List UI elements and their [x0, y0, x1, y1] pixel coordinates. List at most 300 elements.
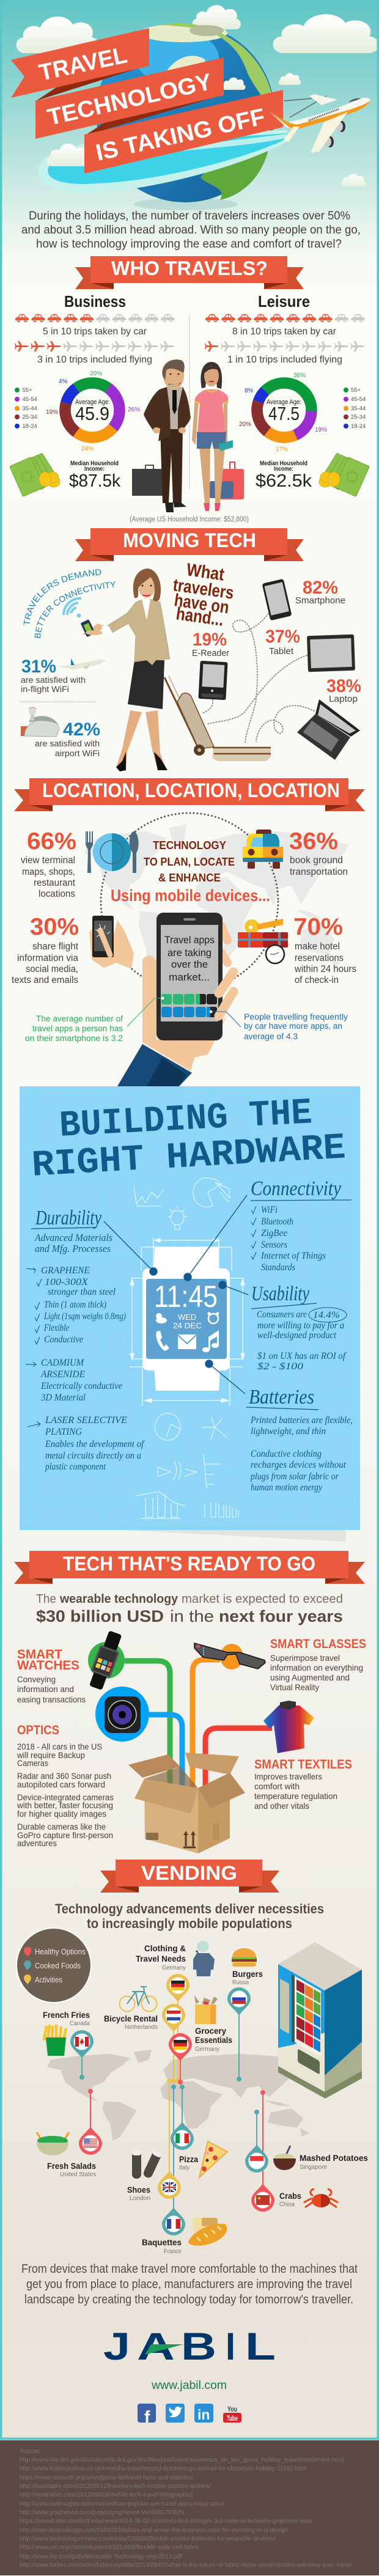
dotted connectors from devices to suitcase [202, 611, 314, 743]
location: burgers, Russia [227, 1948, 263, 2015]
location: pizza, Italy: Italy [179, 2164, 190, 2171]
text: smart textiles: and other vitals [254, 1801, 309, 1811]
legend: leisure age groups: 35-44 [351, 405, 366, 412]
income: business [69, 460, 120, 491]
wearable market headline: next four years [219, 1607, 343, 1625]
callout: 4.3 apps for car travellers: People travelling frequently [244, 1012, 348, 1021]
stat: 70% [293, 914, 356, 985]
text: smart glasses: Virtual Reality [270, 1682, 319, 1692]
stat: airport wifi 42% [21, 707, 100, 758]
text: smart textiles: comfort with [254, 1781, 300, 1791]
stat: 30%: social media, [26, 964, 78, 974]
note: average income: (Average US Household Income: $52,800) [130, 516, 249, 523]
section: connectivity: Sensors [261, 1240, 287, 1250]
laser selective plating: PLATING [45, 1427, 82, 1437]
sleeve [117, 1044, 192, 1086]
section: connectivity: Internet of Things [260, 1251, 326, 1261]
income: leisure: $62.5k [256, 471, 312, 491]
doodle: vertical arrow [204, 1454, 221, 1489]
doodle: small bars [205, 1503, 238, 1517]
location: french fries, Canada: French Fries [43, 2010, 90, 2020]
heading: RIGHT HARDWARE [31, 1127, 347, 1187]
location: burgers, Russia: Burgers [232, 1969, 263, 1979]
legend: leisure age groups: 45-54 [351, 396, 366, 403]
panel: sources: http://www.technologyreview.com/news/528996/flexible-printed-batteries-for-wearable-devices/ [20, 2535, 276, 2542]
stat: 70%: make hotel [295, 941, 340, 952]
wearable market headline: wearable technology [59, 1592, 178, 1606]
banner: Moving Tech [75, 528, 304, 561]
dotted ring [101, 813, 278, 990]
heading: technology to plan, locate and enhance [111, 839, 270, 905]
stat: e-reader 19% [192, 630, 229, 700]
stat: in-flight wifi 31%: 31% [21, 657, 56, 677]
text: optics [17, 1723, 114, 1848]
text: smart glasses: Superimpose travel [270, 1653, 340, 1663]
graphene list: 100-300X [45, 1277, 89, 1287]
illustration: businessman [144, 359, 191, 512]
stat: 30% [12, 914, 79, 985]
icon: airport terminal [21, 707, 59, 737]
text: smart watches: easing transactions [17, 1695, 86, 1704]
icon: alarm clock [208, 1312, 219, 1323]
location: grocery essentials, Germany: Essentials [195, 2035, 232, 2045]
icon: facebook [138, 2404, 156, 2426]
closing text [21, 2262, 358, 2306]
header illustration: globe, clouds, plane and title [11, 5, 379, 210]
location: clothing, Germany: Clothing & [144, 1943, 186, 1953]
wearable market headline: market is expected to exceed [182, 1592, 343, 1606]
legend: business age groups: 18-24 [22, 423, 37, 430]
icon: youtube [223, 2404, 241, 2423]
text: optics: adventures [17, 1839, 57, 1848]
icon: linkedin: in [197, 2407, 210, 2423]
heading: what travelers have on hand: hand... [175, 604, 225, 630]
stat: 66%: maps, shops, [22, 867, 75, 877]
stat: 36%: 36% [289, 828, 338, 855]
location: mashed potatoes, Singapore [245, 2144, 368, 2173]
graphene list: stronger than steel [48, 1287, 116, 1297]
wearable market headline: $30 billion USD [36, 1607, 164, 1625]
smart textile shirt icon [263, 1702, 314, 1753]
cloud: bottom right [341, 174, 366, 186]
legend: vending categories [17, 1928, 91, 2003]
illustration: wearable tech tubes and box [86, 1629, 314, 1853]
legend: business age groups: 55+ [22, 387, 32, 394]
car pictogram row: 5 of 10 [15, 314, 175, 322]
stat: 70%: reservations [295, 953, 344, 963]
donut chart: business age: 45.9 [75, 403, 109, 424]
heading: what travelers have on hand: travelers [172, 575, 235, 603]
heading: technology to plan, locate and enhance: Using mobile devices... [111, 886, 270, 905]
intro text [21, 210, 361, 251]
location: baguettes, France: Baquettes [142, 2237, 182, 2247]
illustration: businesswoman [86, 569, 170, 771]
panel: sources [0, 2440, 379, 2575]
location: french fries, Canada [43, 2010, 94, 2058]
icon: airliner [57, 658, 106, 669]
location: shoes, London: Shoes [127, 2185, 150, 2195]
icon: shirt and cap [193, 1941, 215, 1976]
doodle: pie chart [193, 1178, 230, 1207]
pin stems and location dots [82, 1999, 263, 2210]
text: smart watches: Conveying [17, 1674, 56, 1684]
cadmium arsenide: 3D Material [40, 1393, 86, 1403]
location: crabs, China: Crabs [279, 2191, 301, 2201]
watch date: WED [178, 1312, 196, 1322]
curved heading: travelers demand better connectivity: TRAVELERS DEMAND [23, 569, 101, 625]
location: clothing, Germany: Germany [162, 1964, 186, 1971]
section: durability: Durability [35, 1207, 102, 1229]
tube: orange [193, 1660, 220, 1788]
panel: sources: http://www.holidayextras.co.uk/news/hx-travel/record-numbers-go-abroad-for-christmas-holiday-11192.html [20, 2465, 306, 2472]
panel: sources: http://www.fastcodesign.com/1669283/dollars-and-sense-the-business-case-for-investing-in-ui-design [20, 2526, 288, 2534]
car stat: 8 in 10 trips taken by car [232, 326, 337, 337]
panel: sources: http://www.forbes.com/sites/forbesstylefile/2014/05/07/what-is-the-future-of-fabric-these-smart-textiles-will-blow-your-mind/ [20, 2561, 351, 2569]
stat: 70%: within 24 hours [294, 964, 356, 974]
graphene list: Light (1sqm weighs 0.8mg) [43, 1311, 126, 1322]
stat: tablet 37%: 37% [265, 627, 300, 647]
text: smart watches: WATCHES [17, 1658, 79, 1673]
ribbon 2 [35, 57, 224, 139]
screen text: Travel apps [164, 934, 215, 946]
legend: vending categories: Activities [35, 1975, 62, 1984]
heading: technology to plan, locate and enhance: TECHNOLOGY [153, 839, 226, 852]
heading: what travelers have on hand: have on [173, 591, 230, 617]
text: smart textiles: SMART TEXTILES [254, 1757, 352, 1772]
wearable market headline [36, 1592, 343, 1625]
airplane [270, 94, 370, 153]
location: grocery essentials, Germany: Grocery [195, 2026, 226, 2036]
section: batteries: Batteries [249, 1386, 314, 1408]
section: connectivity: WiFi [261, 1205, 278, 1215]
panel: sources: http://www.rsc.org/chemistryworld/2014/09/flexible-solar-cell-fabric [20, 2544, 199, 2551]
icon: linkedin [194, 2404, 213, 2423]
hand [142, 955, 227, 1071]
section: usability [251, 1282, 347, 1372]
doodle: bar chart [136, 1492, 186, 1518]
section: durability: and Mfg. Processes [35, 1243, 111, 1254]
closing text: landscape by creating the technology today for tomorrow's traveller. [24, 2293, 353, 2306]
logo: Jabil: B [181, 2325, 216, 2368]
flying stat: 3 in 10 trips included flying [37, 355, 152, 365]
title text: IS TAKING OFF: IS TAKING OFF [94, 104, 267, 166]
location: burgers, Russia: Russia [232, 1979, 249, 1986]
panel: sources: Sources [20, 2448, 40, 2455]
income: business: $87.5k [69, 471, 120, 491]
intro text: and about 3.5 million head abroad. With so many people on the go, [21, 224, 361, 237]
illustration: rolling suitcase [164, 676, 271, 761]
location: grocery essentials, Germany [169, 1995, 232, 2061]
ribbon fold 1 [36, 65, 149, 101]
sketch doodles [134, 1178, 238, 1518]
section: durability: Advanced Materials [34, 1232, 112, 1243]
callout: 3.2 average apps [25, 996, 164, 1043]
illustration: red suitcase and bag [209, 462, 244, 499]
section: usability: more willing to pay for a [257, 1320, 344, 1331]
legend: leisure age groups: 25-34 [351, 414, 366, 421]
donut chart: business age: 20% [90, 370, 102, 377]
stat: airport wifi 42%: are satisfied with [35, 739, 100, 748]
heading: Business: Business [64, 292, 126, 311]
icon: youtube: You [227, 2405, 237, 2413]
panel: sources: https://www.ustravel.org/news/press-kit/travel-facts-and-statistics [20, 2474, 193, 2481]
stat: laptop 38%: Laptop [329, 694, 358, 704]
stat: tablet 37%: Tablet [269, 646, 294, 657]
heading: what travelers have on hand [172, 560, 235, 630]
text: smart glasses: information on everything [270, 1663, 363, 1673]
screen text: market... [169, 971, 210, 983]
laser selective plating [28, 1415, 145, 1472]
callout: 4.3 apps for car travellers [209, 1010, 348, 1041]
income: business: Median Household [70, 460, 119, 467]
text: smart textiles [254, 1757, 352, 1811]
cloud: small right [279, 73, 301, 85]
callout: 3.2 average apps: on their smartphone is 3.2 [25, 1034, 123, 1043]
screen text: over the [171, 959, 208, 970]
watch strap bottom [154, 1367, 220, 1391]
heading: Leisure: Leisure [258, 292, 310, 311]
watch screen [146, 1279, 227, 1359]
panel: sources: https://www6.slac.stanford.edu/news/2014-06-02-scientists-find-stronger-3-d-material-behaves-graphene.aspx [20, 2517, 313, 2525]
location: shoes, London [127, 2150, 181, 2202]
legend: leisure age groups: 55+ [351, 387, 361, 394]
icon: twitter [166, 2404, 185, 2423]
text: optics: Device-integrated cameras [17, 1793, 114, 1802]
icon: bicycle [120, 1987, 156, 2011]
section: batteries: Conductive clothing [251, 1449, 322, 1459]
text: optics: OPTICS [17, 1723, 59, 1737]
stat: 36%: book ground [290, 855, 343, 866]
icon: youtube: Tube [227, 2414, 238, 2423]
section: batteries: Printed batteries are flexible, [250, 1415, 353, 1426]
world map with vending pins [47, 2050, 318, 2141]
stat: 30%: information via [17, 953, 78, 963]
wearable market headline: in the [170, 1607, 214, 1625]
globe [96, 23, 274, 202]
icon: telephone [156, 1331, 169, 1351]
section: connectivity: Standards [261, 1262, 295, 1273]
icon: salad bowl [37, 2132, 69, 2155]
logo: Jabil: J [103, 2325, 130, 2368]
icon: bread [188, 2218, 227, 2246]
cloud: large left [17, 17, 99, 53]
callout: 4.3 apps for car travellers: average of 4.3 [244, 1032, 298, 1041]
donut chart: leisure age: 47.5 [268, 403, 300, 424]
panel: sources: http://www.cwtinsights.com/market/how-popular-are-travel-apps-today.shtml [20, 2500, 224, 2508]
stat: 70%: of check-in [295, 975, 339, 985]
legend: leisure age groups [344, 387, 366, 430]
doodle: flow diagram [158, 1461, 197, 1479]
watch case [142, 1268, 230, 1371]
stat: e-reader 19%: 19% [193, 630, 227, 650]
cadmium arsenide [26, 1358, 122, 1403]
section: durability [26, 1207, 145, 1472]
background world map [85, 825, 349, 977]
panel: leisure travelers [205, 292, 369, 496]
icon: grocery bag [194, 1995, 218, 2024]
panel: sources: http://www.rita.dot.gov/bts/sites/rita.dot.gov.bts/files/publications/america_on_the_go/us_holiday_travel/html/entire.html [20, 2456, 344, 2464]
banner: Tech that's ready to go [14, 1551, 365, 1584]
logo: Jabil: A [137, 2325, 175, 2368]
legend: business age groups: 45-54 [22, 396, 37, 403]
income: leisure [256, 460, 312, 491]
section: usability: Consumers are [257, 1309, 307, 1320]
cloud: on globe [222, 78, 246, 90]
title ribbon [11, 28, 283, 174]
location: fresh salads, United States [37, 2127, 102, 2178]
logo: Jabil [103, 2325, 276, 2368]
illustration: smartwatch blueprint [130, 1238, 245, 1406]
section: connectivity: Connectivity [251, 1177, 342, 1200]
cardboard box [128, 1753, 245, 1853]
location: pizza, Italy: Pizza [179, 2154, 198, 2164]
stat: airport wifi 42%: 42% [63, 719, 100, 740]
cloud: right [273, 14, 379, 53]
banner: Who Travels [75, 256, 304, 289]
legend: vending categories: Cooked Foods [35, 1961, 81, 1970]
icon: facebook: f [144, 2407, 150, 2426]
donut chart: business age: 4% [59, 378, 68, 385]
graphene list: Thin (1 atom thick) [44, 1300, 106, 1310]
banner: Who Travels: WHO TRAVELS? [111, 257, 268, 279]
illustration: woman traveler [192, 362, 233, 511]
text: optics: for higher quality images [17, 1809, 106, 1819]
social icons [138, 2404, 241, 2426]
ribbon 1 [11, 28, 149, 98]
legend: business age groups: 25-34 [22, 414, 37, 421]
text: optics: Durable cameras like the [17, 1822, 106, 1831]
icon: money [319, 453, 369, 496]
section: connectivity: Bluetooth [261, 1216, 293, 1227]
text: smart textiles: temperature regulation [254, 1791, 337, 1801]
location: grocery essentials, Germany: Germany [195, 2045, 220, 2053]
icon: weather [156, 1313, 167, 1323]
text: optics: GoPro capture first-person [17, 1831, 113, 1840]
donut chart: leisure age: 36% [293, 372, 306, 379]
text: optics: with better, faster focusing [17, 1801, 113, 1810]
donut chart: leisure age: 19% [315, 427, 327, 433]
vending headline: Technology advancements deliver necessities [55, 1901, 324, 1916]
intro text: During the holidays, the number of travelers increases over 50% [29, 210, 350, 223]
doodle: line chart [134, 1187, 164, 1206]
section: connectivity: ZigBee [261, 1228, 287, 1238]
donut chart: business age: 26% [128, 407, 140, 413]
donut chart: business age: 19% [46, 409, 58, 416]
watch date: 24 DEC [173, 1321, 202, 1330]
cadmium arsenide: ARSENIDE [40, 1369, 85, 1380]
stat: tablet 37% [265, 627, 355, 672]
banner: Location [14, 778, 365, 811]
location: clothing, Germany [136, 1941, 215, 2002]
location: baguettes, France: France [164, 2248, 182, 2255]
icon: envelope [178, 1334, 196, 1349]
banner: Tech that's ready to go: TECH THAT'S READY TO GO [63, 1553, 315, 1575]
section: usability: 14.4% [313, 1310, 340, 1320]
laser selective plating: LASER SELECTIVE [45, 1415, 127, 1426]
laser selective plating: Enables the development of [45, 1439, 145, 1449]
stat: 66%: 66% [27, 828, 76, 855]
icon: phone in hand [81, 619, 105, 637]
optics camera icon [95, 1687, 149, 1742]
heading [31, 1092, 347, 1187]
website: www.jabil.com [151, 2379, 227, 2392]
heading: what travelers have on hand: What [185, 560, 226, 585]
donut chart: business age: Average Age: [75, 399, 110, 406]
watch date [173, 1312, 202, 1330]
illustration: briefcase [132, 465, 165, 496]
intro text: how is technology improving the ease and comfort of travel? [36, 238, 342, 251]
location: clothing, Germany: Travel Needs [136, 1954, 186, 1963]
section: connectivity [251, 1177, 351, 1273]
location: baguettes, France [142, 2207, 227, 2255]
section: batteries: lightweight, and thin [251, 1426, 326, 1437]
stat: 70%: 70% [293, 914, 343, 940]
car pictogram row: 8 of 10 [205, 314, 365, 322]
heading: BUILDING THE [58, 1092, 313, 1147]
icon: hand tapping phone [89, 916, 134, 969]
ribbon 3 [84, 90, 283, 174]
car stat: 5 in 10 trips taken by car [43, 326, 147, 337]
stat: smartphone 82%: 82% [303, 578, 338, 598]
callout: 3.2 average apps: The average number of [36, 1014, 123, 1023]
location: bicycle rental, Netherlands [104, 1987, 185, 2032]
screen text [164, 934, 215, 983]
illustration: hand holding smartphone [117, 913, 234, 1086]
text: optics: autopiloted cars forward [17, 1780, 105, 1789]
curved heading: travelers demand better connectivity: BETTER CONNECTIVITY [34, 581, 115, 638]
stat: 66%: view terminal [21, 855, 75, 866]
doodle: light bulb [167, 1205, 188, 1229]
donut chart: leisure age: 20% [239, 421, 251, 428]
smart watch icon [86, 1629, 125, 1691]
contrail swoosh [38, 130, 287, 193]
watch time: 11:45 [154, 1279, 218, 1314]
shirt collar [280, 1701, 296, 1710]
title text: TECHNOLOGY: TECHNOLOGY [45, 69, 214, 131]
legend: business age groups [15, 387, 37, 430]
location: crabs, China: China [279, 2201, 295, 2208]
stat: 30%: texts and emails [12, 975, 78, 985]
text: smart watches: SMART [17, 1647, 62, 1662]
watch dimension lines [130, 1238, 245, 1406]
location: fresh salads, United States: United States [60, 2171, 96, 2178]
blueprint paper [20, 1086, 360, 1530]
icon: plate and cutlery [86, 831, 139, 873]
cloud: top [193, 5, 241, 29]
tube: red [205, 1728, 272, 1788]
banner: Location: LOCATION, LOCATION, LOCATION [42, 779, 340, 801]
stat: e-reader 19%: E-Reader [192, 648, 229, 658]
donut chart: leisure age [239, 372, 327, 453]
stat: in-flight wifi 31%: are satisfied with [21, 675, 86, 685]
icon: fries [44, 2025, 66, 2056]
location: bicycle rental, Netherlands: Netherlands [125, 2023, 158, 2031]
fingers [219, 972, 234, 1016]
cadmium arsenide: CADMIUM [41, 1358, 85, 1368]
cadmium arsenide: Electrically conductive [40, 1381, 122, 1391]
donut chart: leisure age: 17% [276, 446, 288, 453]
banner: Moving Tech: MOVING TECH [123, 529, 256, 551]
graphene list: Flexible [43, 1323, 69, 1333]
icon: crab [304, 2189, 338, 2207]
text: optics: Cameras [17, 1759, 48, 1768]
panel: sources: http://mashable.com/2012/09/03/mobile-tech-travel-infographic/ [20, 2491, 193, 2498]
donut chart: business age: 24% [81, 446, 94, 452]
text: optics: will require Backup [17, 1751, 85, 1760]
section: usability: Usability [251, 1282, 310, 1305]
icon: wifi [64, 598, 81, 617]
legend: vending categories: Healthy Options [35, 1947, 86, 1956]
